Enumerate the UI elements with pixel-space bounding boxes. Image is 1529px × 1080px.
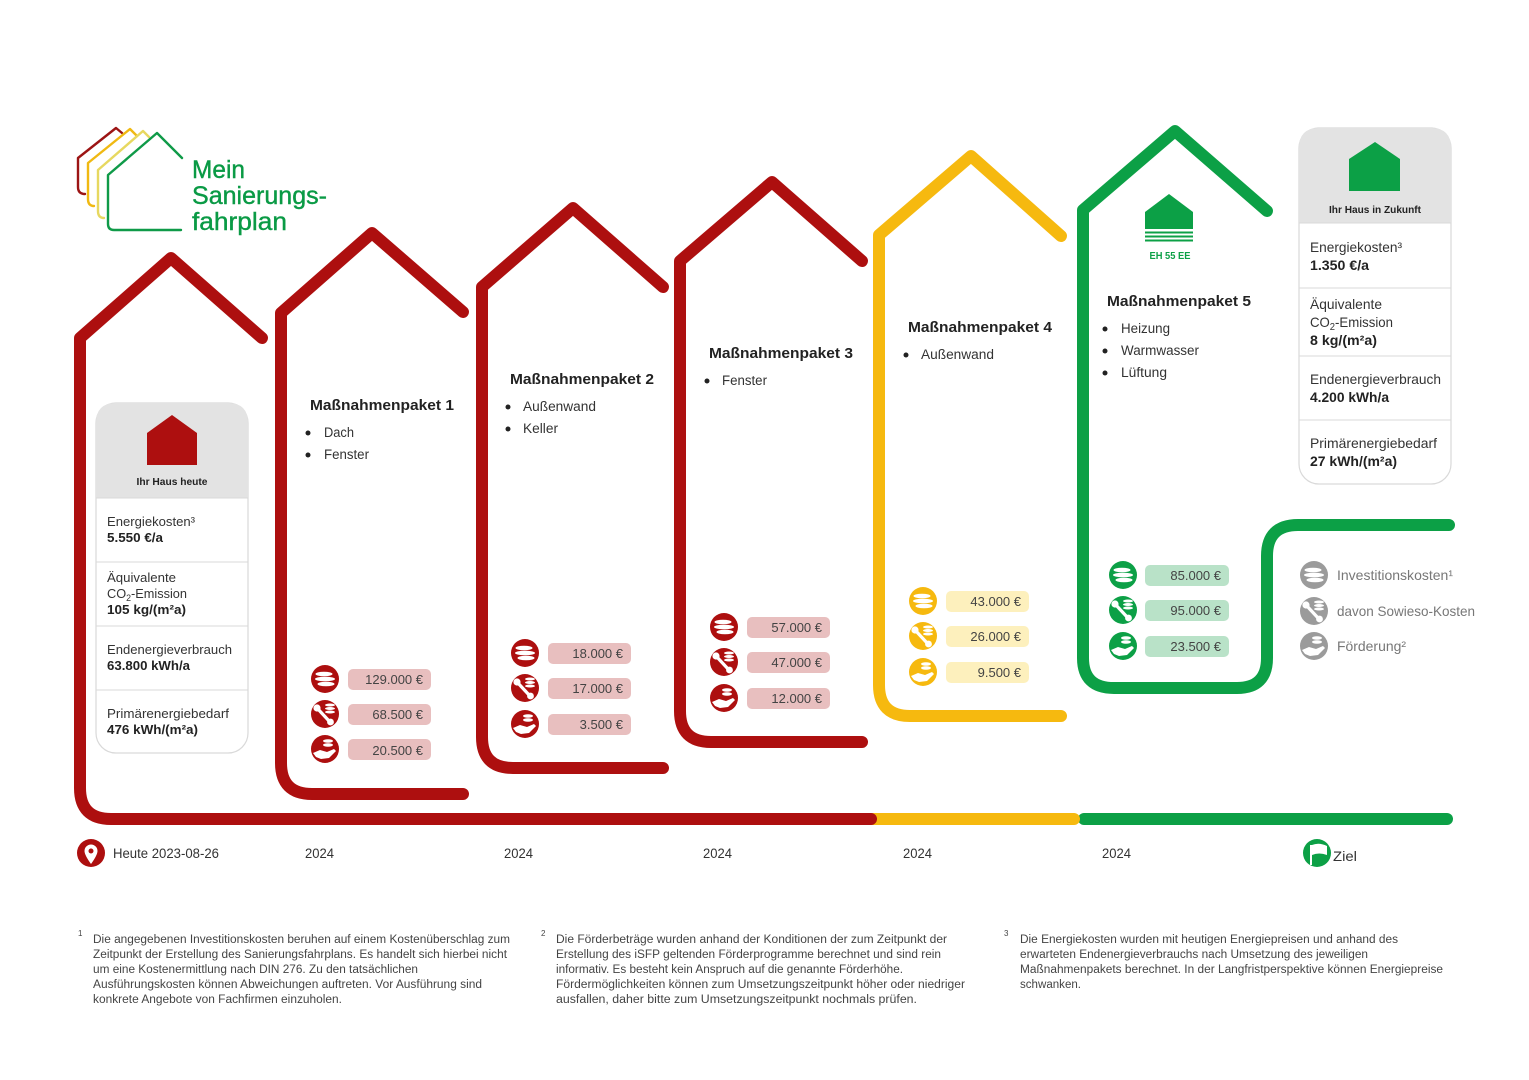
metrics: 105 kg/(m²a) — [107, 602, 186, 617]
logo wordmark — [192, 156, 327, 236]
metrics: Energiekosten³ — [107, 514, 196, 529]
footnote 2: Die Förderbeträge wurden anhand der Konditionen der zum Zeitpunkt der — [556, 934, 947, 946]
timeline labels: 2024 — [903, 846, 932, 861]
package 1 costs: 129.000 € — [365, 672, 424, 687]
metrics: 476 kWh/(m²a) — [107, 722, 198, 737]
package 1 text: Fenster — [324, 447, 369, 462]
package 4 costs: 43.000 € — [970, 594, 1022, 609]
package 4 costs: 9.500 € — [978, 665, 1022, 680]
package 5 text — [1102, 293, 1251, 380]
panel: your house today — [96, 403, 248, 753]
metrics: Endenergieverbrauch — [107, 642, 232, 657]
house outline 4 — [879, 156, 1061, 716]
package 4 text: Außenwand — [921, 347, 994, 362]
timeline bar with current house outline — [80, 258, 1447, 819]
package 1 costs — [311, 665, 431, 763]
package 5 text: Warmwasser — [1121, 343, 1199, 358]
package 1 text: Dach — [324, 425, 354, 440]
package 5 costs: 95.000 € — [1170, 603, 1222, 618]
package 2 costs: 3.500 € — [580, 717, 624, 732]
metrics: -Emission — [1335, 314, 1393, 330]
metrics: Äquivalente — [1310, 296, 1382, 312]
panel caption: Ihr Haus heute — [136, 476, 208, 488]
package 2 costs: 18.000 € — [572, 646, 624, 661]
metrics — [107, 514, 232, 737]
footnote 1: konkrete Angebote von Fachfirmen einzuholen. — [93, 994, 342, 1006]
package 1 costs: 68.500 € — [372, 707, 424, 722]
legend: davon Sowieso-Kosten — [1337, 603, 1475, 619]
footnote 2: ausfallen, daher bitte zum Umsetzungszeitpunkt nochmals prüfen. — [556, 994, 917, 1006]
metrics: CO — [1310, 314, 1331, 330]
footnote 3: 3 — [1004, 929, 1009, 938]
panel caption: Ihr Haus in Zukunft — [1329, 204, 1421, 216]
metrics: 63.800 kWh/a — [107, 658, 191, 673]
logo icon: nested houses — [78, 128, 182, 230]
timeline labels: Heute 2023-08-26 — [113, 846, 219, 861]
metrics: 2 — [126, 593, 131, 603]
package 1 costs: 20.500 € — [372, 743, 424, 758]
timeline labels: 2024 — [305, 846, 334, 861]
footnote 2: 2 — [541, 929, 546, 938]
house outline 3 — [680, 182, 862, 742]
footnote 1: Ausführungskosten können Abweichungen auftreten. Vor Ausführung sind — [93, 979, 482, 991]
legend: Investitionskosten¹ — [1337, 567, 1453, 583]
icon: efficiency house EH 55 EE — [1145, 194, 1193, 262]
footnote 1: 1 — [78, 929, 83, 938]
icon: red house — [147, 415, 197, 465]
package 1 text — [306, 397, 454, 462]
footnote 2: Fördermöglichkeiten können zum Umsetzungszeitpunkt höher oder niedriger — [556, 979, 965, 991]
package 5 costs: 85.000 € — [1170, 568, 1222, 583]
package 3 costs: 47.000 € — [771, 655, 823, 670]
footnote 2: informativ. Es besteht kein Anspruch auf die genannte Förderhöhe. — [556, 964, 903, 976]
footnote 1 — [78, 929, 510, 1006]
icon: efficiency house EH 55 EE: EH 55 EE — [1150, 251, 1191, 262]
house outline 5 with path to goal — [1083, 131, 1449, 688]
package 3 text — [704, 345, 853, 388]
footnote 1: um eine Kostenermittlung nach DIN 276. Zu den tatsächlichen — [93, 964, 418, 976]
package 2 costs — [511, 639, 631, 738]
metrics: Primärenergiebedarf — [107, 706, 229, 721]
timeline labels: 2024 — [703, 846, 732, 861]
package 5 text: Maßnahmenpaket 5 — [1107, 293, 1251, 310]
package 5 costs — [1109, 561, 1229, 660]
package 3 text: Fenster — [722, 373, 767, 388]
footnote 1: Zeitpunkt der Erstellung des Sanierungsfahrplans. Es handelt sich hierbei nicht — [93, 949, 508, 961]
package 1 text: Maßnahmenpaket 1 — [310, 397, 454, 414]
metrics: Äquivalente — [107, 570, 176, 585]
package 4 text — [904, 319, 1053, 362]
metrics: Endenergieverbrauch — [1310, 371, 1441, 387]
package 2 text: Keller — [523, 421, 559, 436]
footnote 1: Die angegebenen Investitionskosten beruhen auf einem Kostenüberschlag zum — [93, 934, 510, 946]
metrics: 27 kWh/(m²a) — [1310, 453, 1397, 469]
logo wordmark: Sanierungs- — [192, 182, 327, 210]
package 4 costs — [909, 587, 1029, 686]
metrics: 4.200 kWh/a — [1310, 389, 1389, 405]
metrics: Primärenergiebedarf — [1310, 435, 1437, 451]
legend: Förderung² — [1337, 638, 1406, 654]
logo wordmark: Mein — [192, 156, 245, 184]
timeline labels: 2024 — [504, 846, 533, 861]
house outline 2 — [482, 208, 663, 768]
footnote 3: Die Energiekosten wurden mit heutigen Energiepreisen und anhand des — [1020, 934, 1398, 946]
package 4 costs: 26.000 € — [970, 629, 1022, 644]
package 5 text: Lüftung — [1121, 365, 1167, 380]
logo wordmark: fahrplan — [192, 208, 287, 236]
package 3 text: Maßnahmenpaket 3 — [709, 345, 853, 362]
package 2 costs: 17.000 € — [572, 681, 624, 696]
house outline 1 — [281, 233, 463, 794]
metrics: 1.350 €/a — [1310, 257, 1369, 273]
package 3 costs: 57.000 € — [771, 620, 823, 635]
package 3 costs — [710, 613, 830, 712]
footnote 3: schwanken. — [1020, 979, 1081, 991]
metrics: 2 — [1330, 322, 1335, 333]
footnote 3 — [1004, 929, 1443, 991]
metrics: 8 kg/(m²a) — [1310, 332, 1377, 348]
icon: green house — [1349, 142, 1400, 191]
package 3 costs: 12.000 € — [771, 691, 823, 706]
package 2 text — [506, 371, 654, 436]
metrics: CO — [107, 586, 126, 601]
goal label: Ziel — [1333, 849, 1357, 864]
timeline labels: 2024 — [1102, 846, 1131, 861]
timeline labels — [113, 846, 1131, 861]
metrics: 5.550 €/a — [107, 530, 164, 545]
icon: location pin — [77, 839, 105, 867]
footnote 3: erwarteten Endenergieverbrauchs nach Umsetzung des jeweiligen — [1020, 949, 1368, 961]
footnote 2 — [541, 929, 965, 1006]
package 2 text: Außenwand — [523, 399, 596, 414]
metrics: -Emission — [131, 586, 187, 601]
logo — [78, 128, 327, 236]
package 5 costs: 23.500 € — [1170, 639, 1222, 654]
package 5 text: Heizung — [1121, 321, 1170, 336]
metrics — [1310, 239, 1441, 469]
icon: goal flag — [1303, 839, 1331, 867]
package 2 text: Maßnahmenpaket 2 — [510, 371, 654, 388]
panel: your house in the future — [1299, 128, 1451, 484]
footnote 2: Erstellung des iSFP geltenden Förderprogramme berechnet und sind rein — [556, 949, 941, 961]
package 4 text: Maßnahmenpaket 4 — [908, 319, 1053, 336]
legend — [1300, 561, 1475, 660]
metrics: Energiekosten³ — [1310, 239, 1402, 255]
footnote 3: Maßnahmenpakets berechnet. In der Langfristperspektive können Energiepreise — [1020, 964, 1443, 976]
